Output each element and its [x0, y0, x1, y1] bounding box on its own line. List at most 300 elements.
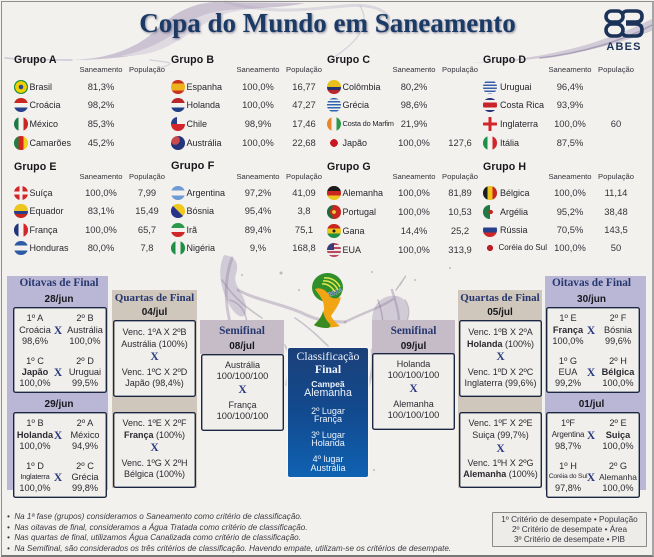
row: Chile: Chile [186, 119, 207, 129]
row: Colômbia: 80,2% [401, 81, 427, 92]
match box: 30/jun right: EUA [559, 367, 577, 377]
panel: Classificação Final [288, 348, 368, 477]
row: Rússia: 143,5 [604, 224, 628, 235]
row: Honduras: Honduras [30, 243, 69, 253]
panel: Oitavas de Final left [7, 276, 108, 490]
heading: Classificação Final: Final [315, 362, 341, 376]
match box: 04/jul lower: X [150, 442, 159, 454]
row: México: 85,3% [88, 118, 114, 129]
row: Inglaterra [483, 117, 621, 131]
match box: 30/jun right: 100,0% [552, 336, 584, 346]
row: Equador [14, 204, 159, 218]
row: Honduras [14, 241, 154, 255]
match box: 29/jun left [13, 412, 107, 498]
row: Irã: 89,4% [245, 224, 271, 235]
row: Portugal [327, 205, 482, 219]
match box: 28/jun left: X [54, 325, 62, 337]
heading: Classificação Final [288, 349, 368, 377]
match box: 30/jun right: 2º F [610, 313, 626, 323]
match box: 28/jun left: Japão [22, 367, 48, 377]
row: Croácia: Croácia [30, 100, 61, 110]
logo: ABES [604, 9, 644, 53]
match box: 29/jun left: Grécia [71, 472, 99, 482]
row: Colômbia [327, 80, 427, 94]
match box: 28/jun left: Uruguai [69, 367, 101, 377]
match box: semifinal 08/jul: 100/100/100 [217, 371, 268, 381]
row: Japão: Japão [342, 138, 367, 148]
match box: semifinal 08/jul: 100/100/100 [217, 411, 268, 421]
match box: 28/jun left: 1º A [27, 313, 43, 323]
fourth place [288, 454, 368, 474]
match box: 05/jul upper: Venc. 1ºB X 2ºA [468, 327, 533, 337]
match box: 01/jul right: 2º G [609, 461, 627, 471]
match box: 04/jul lower: Venc. 1ºG X 2ºH [121, 458, 188, 468]
row: Rússia: Rússia [500, 225, 528, 235]
row: Bélgica: Bélgica [500, 188, 530, 198]
row: Equador: 83,1% [88, 205, 114, 216]
match box: 29/jun left: X [54, 472, 62, 484]
panel: Grupo D [483, 54, 634, 150]
column headers [236, 65, 322, 74]
row: Grécia [327, 98, 427, 112]
row: Argélia [483, 205, 638, 219]
match box: 01/jul right: 1º H [559, 461, 577, 471]
trophy logo: 2014 [327, 287, 343, 299]
third place [288, 430, 368, 450]
match box: semifinal 08/jul: X [238, 384, 247, 396]
row: Bósnia: 95,4% [245, 205, 271, 216]
match box: 29/jun left: México [70, 430, 100, 440]
match box: 04/jul lower: França (100%) [124, 430, 185, 440]
match box: 05/jul lower: Venc. 1ºF X 2ºE [468, 418, 533, 428]
match box: 29/jun left: 2º C [76, 461, 94, 471]
match box: 29/jun left: 100,0% [19, 441, 51, 451]
match box: 28/jun left [13, 307, 107, 393]
row: França: 100,0% [85, 224, 117, 235]
second place [288, 406, 368, 426]
row: Costa Rica: Costa Rica [500, 100, 544, 110]
match box: 30/jun right: X [587, 325, 595, 337]
match box: 30/jun right: 99,2% [555, 378, 581, 388]
heading: Oitavas de Final: Oitavas de Final [552, 277, 631, 289]
date: 29/jun: 29/jun [45, 399, 73, 410]
row: Itália [483, 136, 583, 150]
row: Suíça [14, 186, 156, 200]
panel: Grupo H [483, 160, 638, 260]
second place: França [314, 414, 342, 424]
row: França: França [30, 225, 58, 235]
column headers: Saneamento [548, 65, 592, 74]
row: Suíça: Suíça [30, 188, 53, 198]
row: Camarões: 45,2% [88, 137, 114, 148]
match box: 05/jul upper: Inglaterra (99,6%) [464, 378, 537, 388]
row: Inglaterra: 100,0% [554, 118, 586, 129]
match box: 05/jul lower: Alemanha (100%) [463, 469, 538, 479]
column headers [79, 65, 165, 74]
row: Espanha: 100,0% [242, 81, 274, 92]
row: Coréia do Sul: 100,0% [554, 242, 586, 253]
heading: Oitavas de Final: Oitavas de Final [19, 277, 99, 289]
row: Espanha [171, 80, 316, 94]
row: EUA: 100,0% [398, 244, 430, 255]
match box: 05/jul lower: Venc. 1ºH X 2ºG [467, 458, 534, 468]
heading: Semifinal: Semifinal [219, 325, 265, 337]
match box: 30/jun right: Bósnia [604, 325, 632, 335]
match box: 05/jul lower [459, 412, 542, 488]
match box: 04/jul upper: X [150, 351, 159, 363]
column headers: Saneamento [548, 172, 592, 181]
match box: 04/jul upper: Austrália (100%) [121, 339, 188, 349]
heading: Grupo F: Grupo F [171, 160, 214, 172]
row: EUA: 313,9 [448, 244, 472, 255]
match box: 05/jul lower: Suiça (99,7%) [472, 430, 529, 440]
row: Honduras: 80,0% [88, 242, 114, 253]
match box: 05/jul lower: X [496, 443, 505, 455]
row: Alemanha [327, 186, 472, 200]
match box: 01/jul right: Argentina [552, 430, 584, 439]
row: Honduras: 7,8 [140, 242, 154, 253]
row: Nigéria: 168,8 [292, 242, 316, 253]
tiebreak criteria box: 3º Critério de desempate • PIB [514, 535, 625, 544]
column headers [543, 172, 638, 182]
panel: Semifinal right [372, 320, 455, 354]
column headers: Saneamento [236, 65, 280, 74]
row: Costa do Marfim [327, 117, 427, 131]
match box: 05/jul upper [459, 320, 542, 397]
date: 01/jul: 01/jul [579, 399, 604, 410]
match box: 01/jul right: Coréia do Sul [549, 473, 587, 480]
row: Argentina: 97,2% [245, 187, 271, 198]
match box: 01/jul right: 1ºF [561, 418, 575, 428]
row: Costa Rica [483, 98, 583, 112]
heading: Semifinal: Semifinal [391, 325, 436, 337]
tiebreak criteria box [492, 512, 647, 547]
match box: 01/jul right: 100,0% [602, 441, 634, 451]
row: Japão [330, 137, 472, 148]
heading: Grupo C: Grupo C [327, 54, 370, 66]
match box: 01/jul right [546, 412, 640, 498]
fourth place: Austrália [310, 463, 346, 473]
heading: Classificação Final: Classificação [297, 349, 359, 363]
trophy logo [312, 273, 343, 328]
row: Holanda: Holanda [186, 100, 220, 110]
match box: 29/jun left: 99,8% [72, 483, 98, 493]
row: França: 65,7 [138, 224, 156, 235]
panel: Oitavas de Final right [545, 276, 646, 490]
row: Argentina [172, 186, 316, 200]
row: Brasil: 81,3% [88, 81, 114, 92]
footnotes: • Na Semifinal, são considerados os três critérios de classificação. Havendo empate, utilizam-se os critérios de desempate. [7, 544, 451, 553]
row: Rússia: 70,5% [557, 224, 583, 235]
column headers [548, 65, 634, 74]
row: Nigéria [171, 241, 316, 254]
match box: semifinal 08/jul: Austrália [225, 360, 260, 370]
match box: 30/jun right: Bélgica [602, 367, 634, 377]
match box: semifinal 09/jul: Holanda [397, 359, 430, 369]
date: 09/jul: 09/jul [401, 341, 426, 352]
panel: Grupo A [14, 54, 165, 150]
row: Bósnia: Bósnia [186, 206, 214, 216]
match box: 04/jul upper: Japão (98,4%) [125, 378, 184, 388]
row: Suíça: 100,0% [85, 187, 117, 198]
row: Irã [171, 223, 313, 237]
row: Inglaterra: 60 [611, 118, 621, 129]
tiebreak criteria box: 2º Critério de desempate • Área [512, 525, 627, 534]
panel: Semifinal left [200, 320, 284, 354]
date: 30/jun: 30/jun [577, 294, 606, 305]
column headers: Saneamento [392, 172, 436, 181]
match box: 30/jun right: 100,0% [602, 378, 634, 388]
row: Rússia [483, 223, 638, 237]
row: Nigéria: 9,% [250, 242, 266, 253]
column headers: População [442, 65, 478, 74]
row: Grécia: 98,6% [401, 99, 427, 110]
row: Alemanha: 100,0% [398, 187, 430, 198]
row: Holanda: 47,27 [292, 99, 316, 110]
match box: 01/jul right: 97,8% [555, 483, 581, 493]
row: Bósnia [171, 204, 311, 218]
row: Croácia [14, 98, 114, 112]
row: Bélgica [483, 186, 638, 200]
row: Gana: Gana [342, 226, 365, 236]
heading: Grupo G: Grupo G [327, 161, 371, 173]
match box: semifinal 08/jul [201, 354, 284, 431]
row: Austrália: Austrália [186, 138, 222, 148]
row: Equador: Equador [30, 206, 64, 216]
footnotes: • Nas quartas de final, utilizamos Água Canalizada como critério de classificação. [7, 533, 301, 542]
heading: Grupo B: Grupo B [171, 54, 214, 66]
match box: 01/jul right: 98,7% [555, 441, 581, 451]
match box: 05/jul upper: Holanda (100%) [467, 339, 534, 349]
champion [288, 379, 368, 399]
row: Coréia do Sul: 50 [611, 242, 621, 253]
match box: 30/jun right [546, 307, 640, 393]
heading: Quartas de Final: Quartas de Final [460, 292, 540, 304]
row: Argentina: 41,09 [292, 187, 316, 198]
row: Holanda: 100,0% [242, 99, 274, 110]
match box: 01/jul right: Suiça [606, 430, 630, 440]
row: Colômbia: Colômbia [342, 82, 381, 92]
row: Croácia: 98,2% [88, 99, 114, 110]
row: Itália: 87,5% [557, 137, 583, 148]
match box: 28/jun left: 2º D [76, 356, 94, 366]
panel: Quartas de Final right [458, 290, 542, 488]
match box: 30/jun right: 1º G [559, 356, 577, 366]
column headers: População [129, 65, 165, 74]
heading: Grupo D: Grupo D [483, 54, 526, 66]
date: 05/jul: 05/jul [487, 307, 513, 318]
row: Gana: 25,2 [451, 225, 469, 236]
row: Irã: 75,1 [295, 224, 313, 235]
row: Espanha: 16,77 [292, 81, 316, 92]
column headers: Saneamento [79, 172, 123, 181]
row: Bélgica: 100,0% [554, 187, 586, 198]
row: Argélia: 95,2% [557, 206, 583, 217]
row: Coréia do Sul: Coréia do Sul [498, 243, 547, 252]
row: Alemanha: Alemanha [342, 188, 383, 198]
row: França [14, 223, 156, 237]
match box: 01/jul right: X [587, 472, 595, 484]
row: Japão: 127,6 [448, 137, 472, 148]
row: Camarões: Camarões [30, 138, 71, 148]
match box: 05/jul upper: Venc. 1ºD X 2ºC [468, 367, 533, 377]
third place: Holanda [311, 438, 345, 448]
column headers: População [286, 65, 322, 74]
match box: 29/jun left: Inglaterra [20, 472, 50, 481]
row: Holanda [171, 98, 316, 112]
row: Gana: 14,4% [401, 225, 427, 236]
row: Japão: 100,0% [398, 137, 430, 148]
match box: 30/jun right: França [553, 325, 583, 335]
match box: 04/jul upper [113, 320, 196, 397]
third place: 3º Lugar [311, 430, 345, 440]
match box: semifinal 09/jul: X [409, 383, 418, 395]
row: Costa Rica: 93,9% [557, 99, 583, 110]
panel: Grupo C [327, 54, 478, 148]
row: Portugal: 100,0% [398, 206, 430, 217]
match box: 01/jul right: 100,0% [602, 483, 634, 493]
panel: Grupo B [171, 54, 322, 150]
match box: 04/jul lower: Venc. 1ºE X 2ºF [122, 418, 187, 428]
heading: Grupo A: Grupo A [14, 54, 57, 66]
row: Irã: Irã [186, 225, 197, 235]
match box: 30/jun right: 1º E [559, 313, 577, 323]
heading: Grupo E: Grupo E [14, 161, 56, 173]
logo: ABES: ABES [606, 41, 642, 53]
date: 04/jul: 04/jul [142, 307, 167, 318]
row: Chile [171, 117, 316, 131]
row: Bélgica: 11,14 [605, 187, 627, 198]
column headers [79, 172, 165, 181]
second place: 2º Lugar [311, 406, 345, 416]
column headers: População [442, 172, 478, 181]
row: EUA: EUA [342, 245, 361, 255]
row: EUA [327, 243, 482, 257]
column headers: Saneamento [79, 65, 123, 74]
match box: semifinal 09/jul: 100/100/100 [388, 370, 439, 380]
match box: 01/jul right: 2º E [609, 418, 627, 428]
fourth place: 4º lugar [313, 454, 343, 464]
match box: semifinal 09/jul: 100/100/100 [388, 410, 439, 420]
match box: 29/jun left: X [54, 430, 62, 442]
column headers [236, 172, 322, 181]
footnotes [0, 510, 470, 554]
row: Argélia: Argélia [500, 207, 528, 217]
match box: 29/jun left: Holanda [17, 430, 53, 440]
match box: 30/jun right: 2º H [609, 356, 627, 366]
match box: semifinal 09/jul: Alemanha [393, 399, 434, 409]
column headers [392, 65, 478, 74]
row: Suíça: 7,99 [138, 187, 156, 198]
footnotes: • Nas oitavas de final, consideramos a Água Tratada como critério de classificação. [7, 523, 308, 532]
row: Chile: 17,46 [292, 118, 316, 129]
match box: 01/jul right: Alemanha [599, 472, 637, 482]
row: Argentina: Argentina [186, 188, 225, 198]
row: Brasil: Brasil [30, 82, 52, 92]
match box: 29/jun left: 1º B [26, 418, 44, 428]
date: 28/jun: 28/jun [45, 294, 73, 305]
row: Austrália [171, 136, 316, 150]
column headers: População [286, 172, 322, 181]
match box: 04/jul lower [113, 412, 196, 488]
panel: Grupo G [327, 161, 478, 257]
row: Portugal: Portugal [342, 207, 376, 217]
column headers: População [598, 65, 634, 74]
panel: Grupo F [171, 160, 322, 254]
match box: 28/jun left: 100,0% [19, 378, 51, 388]
row: Alemanha: 81,89 [448, 187, 472, 198]
row: Itália: Itália [500, 138, 519, 148]
match box: 28/jun left: Austrália [67, 325, 103, 335]
footnotes: • Na 1ª fase (grupos) consideramos o Saneamento como critério de classificação. [7, 512, 302, 521]
heading: Quartas de Final: Quartas de Final [115, 292, 194, 304]
row: Uruguai: Uruguai [500, 82, 532, 92]
row: Austrália: 100,0% [242, 137, 274, 148]
row: Inglaterra: Inglaterra [500, 119, 538, 129]
column headers: População [598, 172, 634, 181]
row: México [14, 117, 114, 131]
match box: semifinal 09/jul [372, 353, 455, 430]
match box: 01/jul right: X [587, 430, 595, 442]
row: México: México [30, 119, 58, 129]
column headers: População [129, 172, 165, 181]
match box: 29/jun left: 1º D [26, 461, 44, 471]
match box: 29/jun left: 94,9% [72, 441, 98, 451]
match box: 04/jul upper: Venc. 1ºC X 2ºD [122, 367, 187, 377]
champion: Alemanha [304, 387, 352, 399]
panel: Quartas de Final left [112, 290, 197, 488]
row: Espanha: Espanha [186, 82, 222, 92]
row: Costa do Marfim: Costa do Marfim [342, 119, 394, 128]
match box: semifinal 08/jul: França [228, 400, 256, 410]
match box: 29/jun left: 100,0% [19, 483, 51, 493]
row: Coréia do Sul [483, 241, 638, 255]
row: Chile: 98,9% [245, 118, 271, 129]
column headers: Saneamento [392, 65, 436, 74]
match box: 30/jun right: 99,6% [605, 336, 631, 346]
match box: 28/jun left: Croácia [19, 325, 51, 335]
match box: 04/jul lower: Bélgica (100%) [124, 469, 185, 479]
column headers [392, 172, 478, 181]
row: Equador: 15,49 [135, 205, 159, 216]
match box: 28/jun left: X [54, 367, 62, 379]
match box: 29/jun left: 2º A [77, 418, 93, 428]
champion: Campeã [311, 379, 345, 389]
column headers: Saneamento [236, 172, 280, 181]
row: Argélia: 38,48 [604, 206, 628, 217]
row: Nigéria: Nigéria [186, 243, 215, 253]
panel: Grupo E [14, 161, 165, 255]
row: Uruguai [483, 81, 583, 94]
row: Portugal: 10,53 [448, 206, 472, 217]
row: Camarões [14, 136, 114, 150]
match box: 30/jun right: X [587, 367, 595, 379]
match box: 05/jul upper: X [496, 351, 505, 363]
row: Uruguai: 96,4% [557, 81, 583, 92]
row: Austrália: 22,68 [292, 137, 316, 148]
row: Grécia: Grécia [342, 100, 369, 110]
row: Bósnia: 3,8 [297, 205, 311, 216]
match box: 28/jun left: 1º C [26, 356, 44, 366]
row: Brasil [14, 80, 114, 94]
match box: 04/jul upper: Venc. 1ºA X 2ºB [122, 327, 187, 337]
match box: 28/jun left: 2º B [76, 313, 94, 323]
title: Copa do Mundo em Saneamento [139, 8, 516, 38]
match box: 28/jun left: 98,6% [22, 336, 48, 346]
match box: 28/jun left: 100,0% [69, 336, 101, 346]
row: Costa do Marfim: 21,9% [401, 118, 427, 129]
tiebreak criteria box: 1º Critério de desempate • População [501, 515, 638, 524]
